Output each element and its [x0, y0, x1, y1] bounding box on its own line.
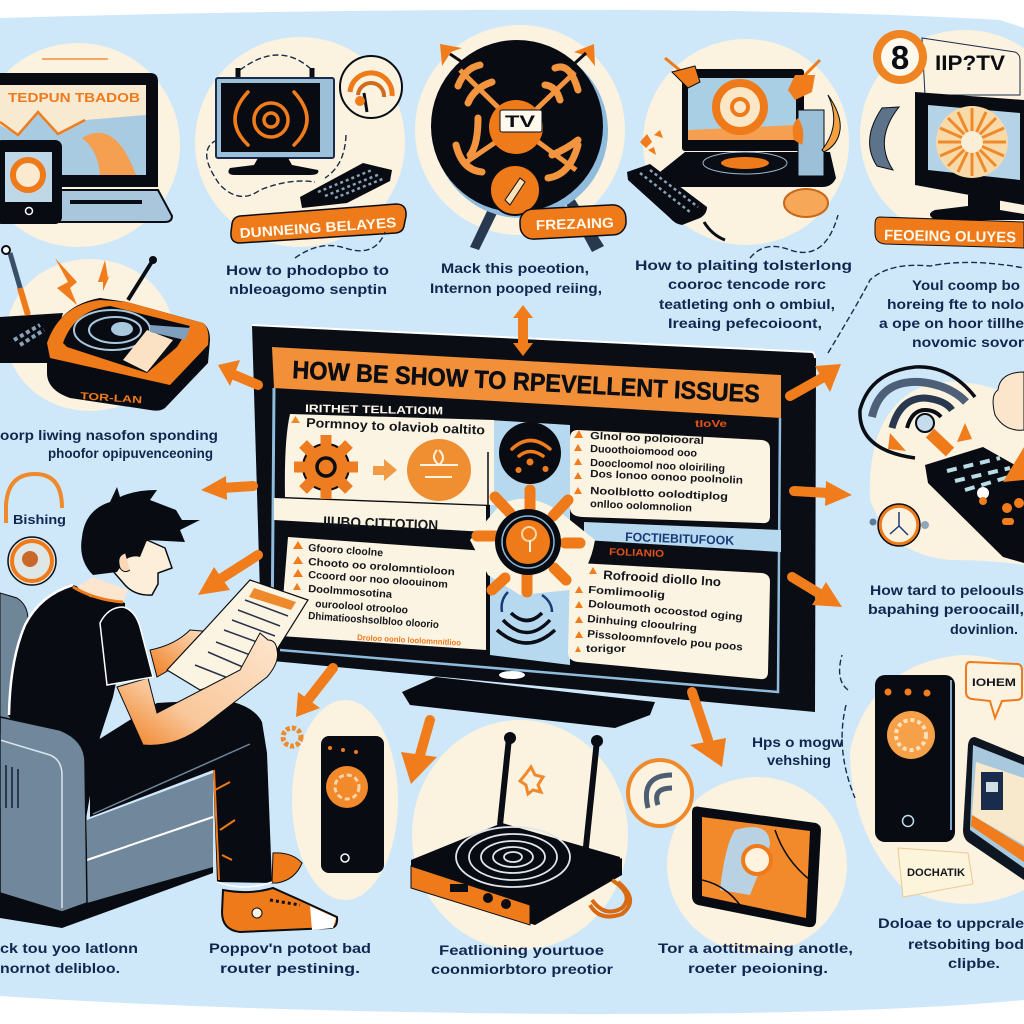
icon: tablet	[963, 737, 1024, 880]
text block: bottom captions: ck tou yoo latlonn	[0, 940, 138, 956]
text block: right caption	[868, 582, 1024, 637]
text block: bottom captions: Poppov'n potoot bad	[209, 940, 371, 956]
text block: caption three	[430, 260, 602, 296]
text block: caption four	[635, 257, 852, 331]
panel: top-right tips: onlloo oolomnolion	[590, 498, 692, 514]
callout: speech box: IOHEM	[972, 677, 1016, 689]
text block: small caption	[752, 734, 843, 768]
panel: top-right tips: Doocloomol noo oloiriling	[590, 457, 725, 475]
text block: caption five	[879, 277, 1024, 350]
panel: lower-left tips: Chooto oo orolomntioloon	[308, 556, 455, 578]
front shoe	[222, 888, 337, 932]
icon: gear	[294, 435, 358, 499]
router body	[47, 298, 210, 411]
text block: caption two	[226, 262, 389, 297]
icon: remote keys	[947, 458, 1024, 525]
text block: bottom captions: roeter peoioning.	[688, 960, 828, 976]
icon: wifi arcs	[860, 367, 975, 458]
icon: wifi round badge	[628, 760, 692, 826]
panel: top-left tips	[285, 403, 494, 505]
text block: caption five: Youl coomp bo	[912, 277, 1020, 293]
panel: lower-right tips: Doloumoth ocoostod oging	[588, 598, 743, 623]
panel: phone and tablet vignette	[840, 655, 1024, 904]
text block: far-right caption: retsobiting bod	[908, 936, 1024, 952]
text block: caption three: Mack this poeotion,	[441, 260, 589, 276]
heading band: troubleshoot section: FOLIANIO	[609, 547, 664, 560]
pill: freezing: FREZAING	[536, 214, 614, 233]
panel: router vignette	[411, 720, 630, 950]
text block: caption four: Ireaing pefecoioont,	[668, 315, 822, 331]
note: document	[898, 848, 973, 897]
icon: signal waves	[497, 592, 555, 643]
illustration: sofa back and seat	[0, 593, 213, 928]
panel: lower-right tips: Pissoloomnfovelo pou poos	[587, 628, 743, 654]
panel: router with lightning vignette	[0, 246, 210, 411]
text block: bottom captions	[0, 940, 853, 977]
label: IPTV tag	[922, 38, 1020, 95]
text block: left caption: phoofor opipuvenceoning	[48, 445, 213, 461]
hair	[81, 487, 200, 575]
arrow: down right	[690, 692, 726, 767]
text block: far-right caption	[878, 915, 1024, 971]
icon: warning sun	[470, 490, 595, 595]
icon: remote	[300, 163, 392, 208]
callout: speech box	[966, 662, 1022, 718]
newspaper	[167, 580, 308, 690]
icon: bishing arc label: Bishing	[13, 512, 66, 527]
pill: buffering delays: DUNNEING BELAYES	[239, 214, 397, 241]
panel: lower-left tips: ouroolool otrooloo	[315, 598, 408, 616]
icon: small arrow	[373, 459, 397, 481]
torso	[8, 585, 125, 825]
arrow: upper right	[790, 364, 841, 396]
text block: bottom captions: nornot delibloo.	[0, 960, 120, 976]
panel: top-right tips: Duoothoiomood ooo	[590, 443, 697, 460]
panel: top-right tips: Noolblotto oolodtiplog	[590, 485, 728, 503]
illustration: sofa arm	[0, 717, 87, 912]
arrow: down center	[401, 720, 437, 784]
center blue strip	[490, 420, 570, 665]
text block: caption four: cooroc tencode rorc	[668, 276, 826, 292]
text block: caption four: teatleting onh o ombiul,	[659, 296, 835, 312]
icon: remote control	[627, 164, 707, 225]
panel: top-right tips: Dos lonoo oonoo poolnolin	[590, 468, 743, 487]
laptop screen caption: TEDPUN TBADOB	[8, 91, 140, 105]
text block: small caption: Hps o mogw	[752, 734, 843, 750]
heading band: video section: IIUBO CITTOTION	[323, 513, 438, 533]
icon: signal rings	[235, 92, 307, 145]
icon: satellite signal badge	[340, 56, 402, 118]
panel: laptop and tablet vignette	[0, 43, 180, 247]
pill: freezing issues: FEOEING OLUYES	[884, 227, 1016, 246]
tv: central television	[252, 325, 816, 728]
legs	[90, 701, 272, 887]
panel: router dish vignette	[415, 25, 627, 252]
text block: far-right caption: clipbe.	[948, 955, 1000, 971]
icon: orange cross signal	[456, 65, 578, 178]
pill: buffering delays	[231, 204, 406, 243]
panel: lower-left tips: Gfooro cloolne	[308, 542, 384, 559]
text block: caption four: How to plaiting tolsterlong	[635, 257, 852, 273]
illustration: person reading a paper	[8, 487, 337, 932]
arrow: middle left	[201, 476, 253, 500]
text block: small caption: vehshing	[767, 752, 831, 768]
panel: remote and clock vignette	[860, 367, 1024, 565]
arrow: upper left	[218, 360, 258, 386]
panel: router with lightning vignette: TOR-LAN	[80, 391, 142, 406]
panel: lower-left tips	[280, 537, 486, 650]
panel: laptop and remote vignette	[627, 39, 849, 258]
text block: caption two: How to phodopbo to	[226, 262, 389, 278]
arrow: middle right	[794, 481, 852, 506]
arrow: top two-way	[513, 305, 533, 356]
text block: caption five: a ope on hoor tillhe	[879, 315, 1024, 331]
heading band: video section	[274, 498, 486, 533]
text block: left caption: oorp liwing nasofon sponding	[0, 427, 218, 443]
panel: top-left tips: IRITHET TELLATIOIM	[305, 403, 443, 417]
badge: number 8: 8	[891, 39, 909, 76]
text block: bottom captions: coonmiorbtoro preotior	[431, 961, 614, 977]
neck and face	[77, 577, 128, 602]
icon: orange coil	[590, 880, 630, 917]
back shoe	[272, 853, 302, 883]
note: document: DOCHATIK	[907, 867, 965, 879]
panel: top-right tips: Glnol oo poloiooral	[590, 430, 704, 447]
arrow: lower left	[198, 555, 258, 595]
text block: bottom captions: Tor a aottitmaing anotle,	[658, 940, 853, 956]
text block: far-right caption: Doloae to uppcrale	[878, 915, 1024, 931]
panel: phone vignette	[292, 700, 398, 900]
text block: bottom captions: router pestining.	[220, 960, 360, 976]
sleeve	[100, 607, 153, 685]
text block: caption five: novomic sovor	[912, 334, 1024, 350]
icon: arrowheads	[440, 44, 595, 66]
icon: orange bumps	[665, 58, 820, 100]
pill: freezing issues	[875, 217, 1024, 248]
text block: caption three: Internon pooped reiing,	[430, 280, 602, 296]
panel: lower-left tips: Dhimatiooshsolbloo oloorio	[308, 610, 439, 631]
arrow: down left	[296, 668, 333, 717]
icon: orange badge	[407, 439, 471, 501]
panel: tablet vignette	[667, 777, 847, 953]
text block: right caption: bapahing peroocaill,	[868, 601, 1024, 617]
panel: IPTV monitor vignette	[828, 30, 1024, 353]
panel: top-right tips: tIoVe	[695, 419, 728, 430]
icon: concentric swirl	[456, 827, 570, 887]
pill: freezing	[519, 204, 627, 240]
text block: right caption: dovinlion.	[950, 621, 1018, 637]
panel: lower-right tips: Fomlimoolig	[588, 584, 665, 601]
icon: lightning bolts	[55, 258, 110, 305]
icon: wifi badge	[499, 422, 561, 484]
far arm	[150, 630, 213, 677]
icon: cup with flame	[793, 95, 840, 176]
text block: caption two: nbleoagomo senptin	[229, 281, 387, 297]
icon: small gear	[283, 728, 301, 746]
panel: lower-left tips: Doolmmosotina	[308, 583, 393, 601]
panel: lower-left tips: Ccoord oor noo oloouinom	[308, 569, 448, 591]
panel: lower-right tips: torigor	[586, 643, 626, 655]
icon: clock	[870, 504, 929, 546]
text block: right caption: How tard to peloouls	[870, 582, 1024, 598]
arrow: lower right	[792, 577, 842, 607]
icon: small flower	[520, 767, 543, 794]
text block: bottom captions: Featlioning yourtuoe	[439, 942, 604, 958]
text block: left caption	[0, 427, 218, 461]
text block: caption five: horeing fte to nolo	[887, 296, 1024, 312]
panel: streaming monitor vignette	[195, 37, 406, 258]
panel: lower-right tips: Dinhuing clooulring	[587, 613, 697, 635]
panel: top-left tips: Pormnoy to olaviob oaltito	[306, 415, 485, 437]
panel: lower-left tips: Droloo oonlo loolomnnitlioo	[357, 633, 461, 647]
icon: orange cross signal: TV	[505, 112, 536, 131]
panel: top-right tips	[570, 419, 770, 523]
badge: number 8	[873, 30, 927, 84]
near arm and hand	[117, 633, 278, 745]
label: IPTV tag: IIP?TV	[935, 52, 1005, 75]
icon: sun on screen	[936, 106, 1008, 178]
title banner: HOW BE SHOW TO RPEVELLENT ISSUES	[292, 356, 761, 408]
panel: lower-right tips	[568, 563, 770, 679]
heading band: troubleshoot section	[584, 522, 781, 560]
heading band: troubleshoot section: FOCTIEBITUFOOK	[625, 530, 734, 548]
panel: lower-right tips: Rofrooid diollo lno	[603, 568, 722, 589]
icon: bishing arc label	[6, 474, 66, 585]
tv stand	[402, 677, 655, 728]
